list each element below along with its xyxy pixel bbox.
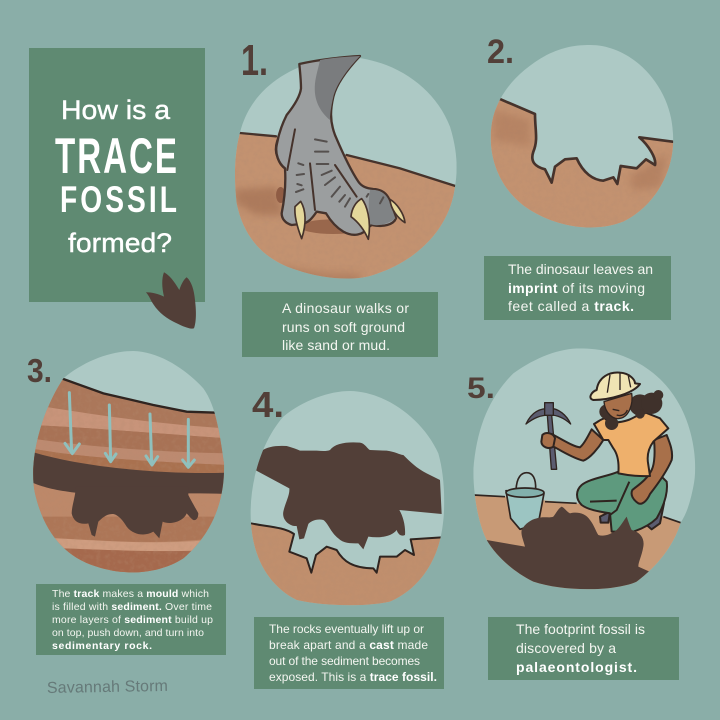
title: formed?: formed? bbox=[68, 228, 172, 258]
title: FOSSIL: FOSSIL bbox=[60, 179, 180, 220]
caption 2 bbox=[484, 256, 671, 320]
panel 5: palaeontologist discovers the fossil bbox=[474, 348, 695, 590]
caption 3: sedimentary rock. bbox=[52, 640, 152, 652]
caption 3: The track makes a mould which bbox=[52, 588, 209, 600]
caption 1: A dinosaur walks or bbox=[282, 300, 409, 316]
caption 4: exposed. This is a trace fossil. bbox=[269, 670, 437, 684]
dinosaur leg and toes bbox=[276, 56, 405, 239]
caption 5: palaeontologist. bbox=[516, 659, 637, 675]
number 1: 1. bbox=[241, 36, 268, 85]
title: TRACE: TRACE bbox=[55, 128, 179, 184]
caption 5: discovered by a bbox=[516, 640, 616, 656]
panel 2: track imprint bbox=[490, 45, 674, 228]
caption 5 bbox=[488, 617, 679, 680]
panel 3: sediment layers filling the mould bbox=[33, 351, 224, 572]
number 2: 2. bbox=[487, 33, 514, 71]
panel 4: exposed cast bbox=[250, 391, 444, 606]
caption 1 bbox=[242, 292, 438, 357]
caption 2: feet called a track. bbox=[508, 298, 634, 314]
caption 2: The dinosaur leaves an bbox=[508, 261, 653, 277]
ground bbox=[475, 496, 681, 590]
number 4: 4. bbox=[252, 384, 284, 425]
caption 2: imprint of its moving bbox=[508, 280, 645, 296]
caption 4: The rocks eventually lift up or bbox=[269, 622, 424, 636]
number 5: 5. bbox=[467, 372, 495, 405]
arrows pressing down bbox=[65, 393, 194, 467]
caption 3: is filled with sediment. Over time bbox=[52, 601, 212, 613]
caption 5: The footprint fossil is bbox=[516, 621, 645, 637]
caption 3: more layers of sediment build up bbox=[52, 614, 213, 626]
person head, hair and hat bbox=[590, 373, 663, 430]
fossil in the ground bbox=[487, 507, 652, 597]
title: How is a: How is a bbox=[61, 95, 171, 125]
caption 4: break apart and a cast made bbox=[269, 638, 428, 652]
mould filled with sediment bbox=[33, 452, 224, 494]
signature: Savannah Storm bbox=[47, 678, 168, 697]
panel 1: dinosaur foot on soft ground bbox=[235, 54, 456, 278]
title panel bbox=[29, 48, 205, 302]
person torso and arms bbox=[541, 412, 672, 504]
icon: dinosaur footprint bbox=[146, 272, 196, 329]
caption 1: runs on soft ground bbox=[282, 319, 405, 335]
pickaxe bbox=[526, 403, 571, 469]
person legs bbox=[577, 472, 667, 532]
ground bbox=[235, 134, 456, 278]
caption 3 bbox=[36, 584, 226, 655]
caption 1: like sand or mud. bbox=[282, 337, 390, 353]
caption 3: on top, push down, and turn into bbox=[52, 627, 204, 639]
caption 4 bbox=[254, 617, 444, 689]
caption 4: out of the sediment becomes bbox=[269, 654, 420, 668]
cast / trace fossil bbox=[254, 442, 442, 549]
bucket bbox=[506, 473, 544, 529]
number 3: 3. bbox=[27, 352, 52, 389]
claws bbox=[295, 201, 305, 239]
rock layers bbox=[41, 407, 220, 438]
